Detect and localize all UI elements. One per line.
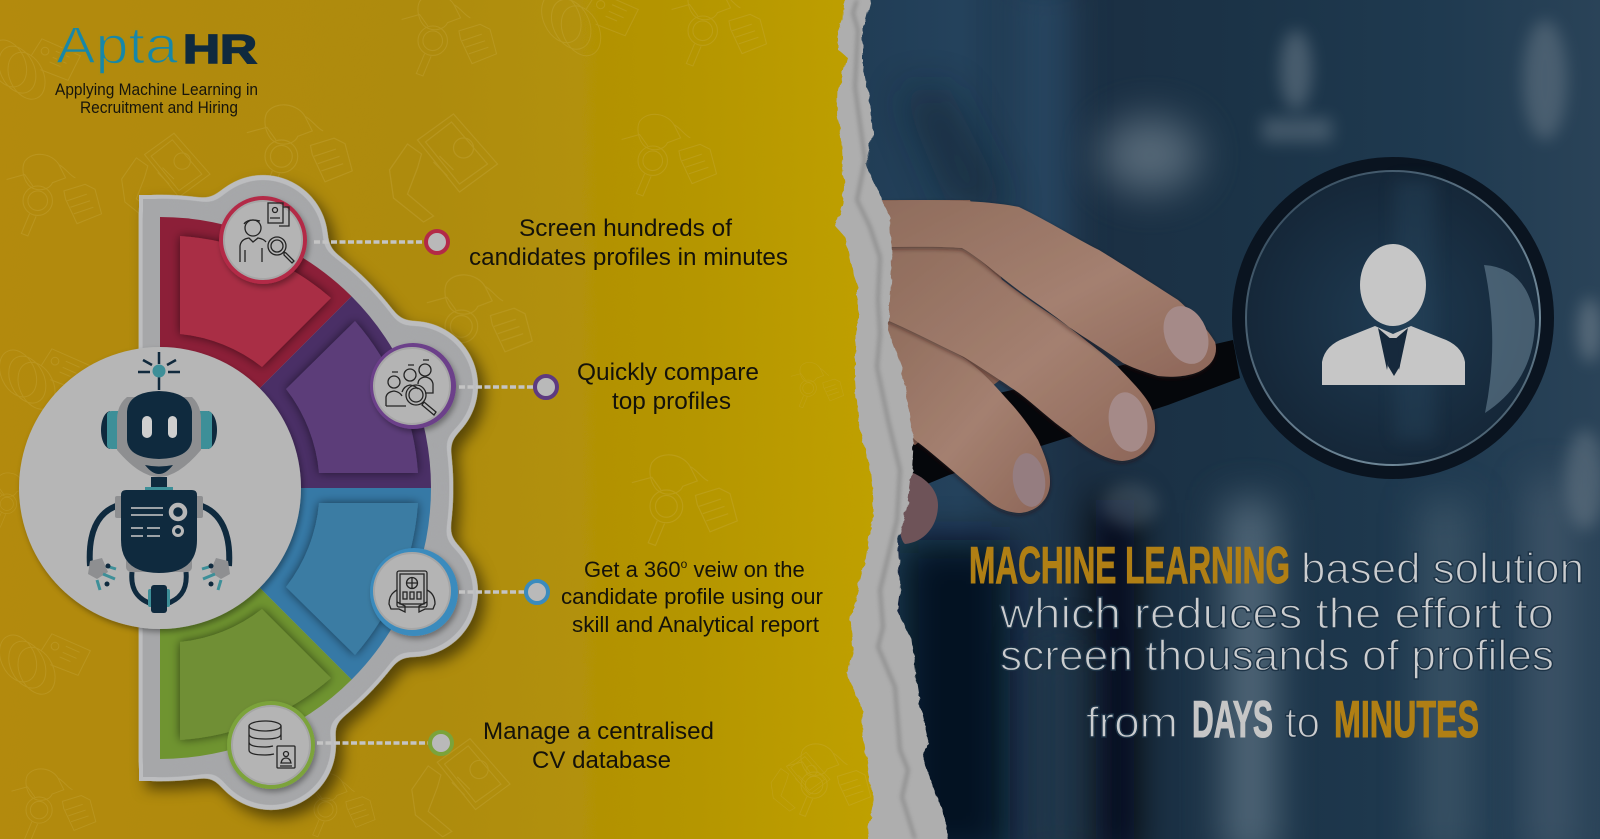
hand holding magnifier [875,200,1217,544]
logo tagline: Recruitment and Hiring [80,99,238,117]
segment: green [160,488,352,759]
caption: screen candidates: Screen hundreds of [519,215,732,242]
ring finger [880,317,1050,513]
background line-art pattern [0,0,871,839]
antenna [138,352,180,390]
caption: 360 view: o [681,557,688,571]
caption: 360 view: veiw on the [687,557,805,582]
palm [875,200,1010,445]
robot illustration [88,352,230,613]
caption: compare profiles: Quickly compare [577,359,759,386]
neck [151,477,167,489]
headline: DAYS [1192,691,1273,749]
body [121,490,197,573]
headline: screen thousands of profiles [1000,632,1554,680]
segment: blue [160,488,431,680]
headline: which reduces the effort to [999,590,1554,638]
icon badge 3: analytical report [370,548,458,636]
headline: MACHINE LEARNING [969,537,1290,595]
magnifying glass [1232,157,1554,479]
headline [969,537,1584,749]
caption: 360 view [561,557,823,637]
middle finger [880,244,1155,461]
head [117,397,201,477]
icon badge 2: compare profiles [370,343,456,429]
caption: 360 view: candidate profile using our [561,584,823,609]
caption: compare profiles: top profiles [612,388,731,415]
caption: CV database: CV database [532,747,671,774]
robot circle [19,347,301,629]
connector 3 [459,581,548,603]
magnifying glass handle [902,340,1240,492]
caption: 360 view: Get a 360 [584,557,681,582]
segment: purple [160,296,431,488]
yellow panel background [0,0,874,839]
grey plate with bumps [139,175,478,810]
torn paper strip [700,0,950,839]
connector 1 [314,231,448,253]
legs and wheel [132,572,186,604]
semicircular diagram [19,175,557,810]
headline: from [1086,699,1178,747]
index finger [880,200,1216,377]
caption: CV database: Manage a centralised [483,718,714,745]
connector 2 [459,376,557,398]
hands [88,558,108,579]
connector 4 [317,732,452,754]
caption: CV database [483,718,714,774]
logo: AptaHR [55,17,258,117]
arms [90,505,229,566]
icon badge 1: candidate screening [219,196,307,284]
photo background: blurred office [800,0,1600,839]
icon: person silhouette in lens [1322,244,1465,385]
ears [101,411,110,449]
headline: to [1285,699,1320,747]
icon badge 4: CV database [227,701,315,789]
caption: compare profiles [577,359,759,415]
segment: red [160,217,352,488]
logo tagline [55,81,258,117]
headline: based solution [1301,545,1584,593]
caption: screen candidates: candidates profiles in minutes [469,244,788,271]
headline: MINUTES [1334,691,1479,749]
caption: screen candidates [469,215,788,271]
pinkie finger [898,470,938,544]
logo: AptaHR: HR [183,26,257,72]
logo tagline: Applying Machine Learning in [55,81,258,99]
caption: 360 view: skill and Analytical report [572,612,819,637]
logo: AptaHR: Apta [56,17,178,75]
